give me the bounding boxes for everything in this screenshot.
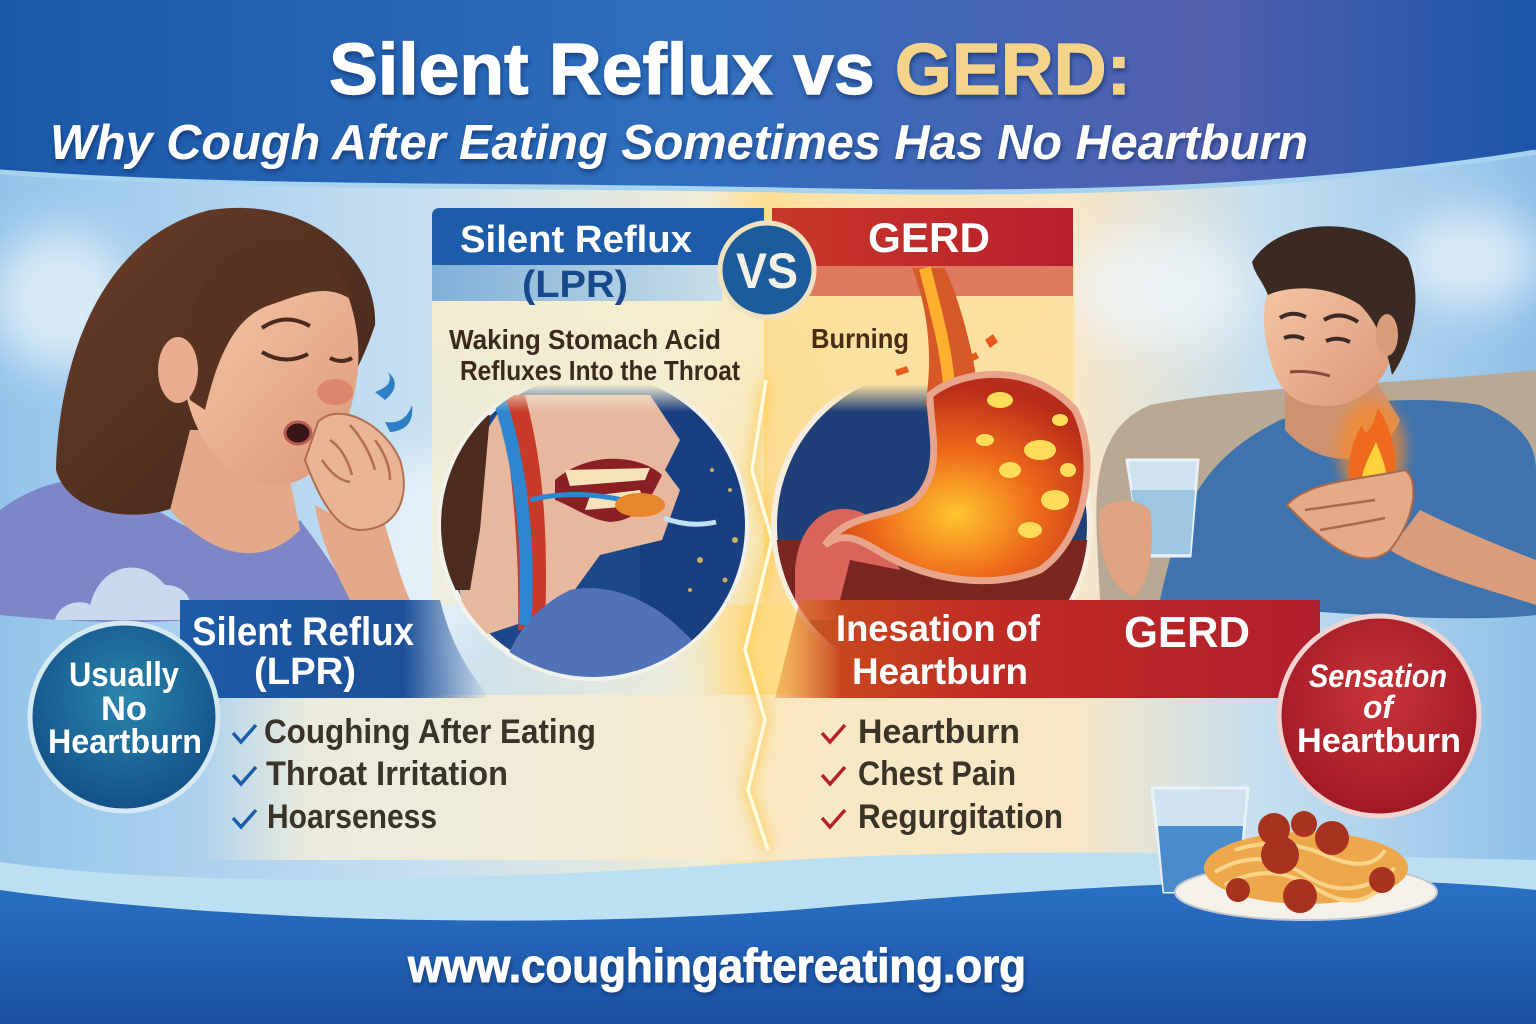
- icon: water glass: [1152, 788, 1248, 892]
- banner: Silent Reflux: (LPR): [254, 651, 356, 693]
- throat spray: [664, 518, 716, 524]
- acid bubbles: [976, 392, 1076, 538]
- VS badge: VS: [736, 243, 798, 299]
- list: gerd symptoms: Chest Pain: [858, 755, 1016, 793]
- footer band: [0, 852, 1536, 1024]
- man hair: [1252, 226, 1415, 375]
- banner: Silent Reflux: Silent Reflux: [192, 610, 414, 654]
- hand holding glass: [1099, 501, 1152, 597]
- illustration: burning stomach: [771, 266, 1093, 647]
- man body: [1160, 400, 1536, 618]
- heading: GERD tab: GERD: [868, 214, 990, 261]
- woman eyes: [262, 319, 352, 361]
- woman ear: [158, 337, 198, 403]
- text: waking stomach acid: Waking Stomach Acid: [449, 324, 721, 355]
- lightning divider: [745, 380, 772, 850]
- list: silent reflux symptoms: Coughing After Eating: [264, 713, 596, 751]
- throat face: [440, 395, 680, 640]
- illustration: coughing woman: [0, 208, 412, 622]
- text: burning: Burning: [811, 323, 909, 354]
- man eyes: [1280, 314, 1358, 342]
- woman hair back: [56, 208, 375, 515]
- banner: GERD: GERD: [1124, 608, 1250, 657]
- illustration: man with heartburn: [1096, 226, 1536, 618]
- chest flame: [1349, 408, 1395, 495]
- cough droplets: [375, 372, 412, 432]
- text: waking stomach acid: [449, 324, 740, 386]
- badge: usually no heartburn: No: [101, 690, 147, 728]
- badge: usually no heartburn: Heartburn: [48, 723, 202, 761]
- throat shoulder: [510, 588, 692, 677]
- list: gerd symptoms: Regurgitation: [858, 798, 1063, 836]
- banner: GERD: Heartburn: [852, 651, 1028, 692]
- woman nose blush: [317, 379, 353, 405]
- list backdrop: [200, 695, 1120, 860]
- header band: [0, 0, 1536, 192]
- woman mouth: [285, 422, 311, 444]
- banner: GERD: Inesation of: [836, 608, 1041, 649]
- list: gerd symptoms: Heartburn: [858, 713, 1020, 751]
- stomach lower tissue: [776, 540, 1088, 648]
- illustration: throat cross-section: [440, 370, 760, 680]
- woman fringe: [186, 239, 352, 410]
- heading: Silent Reflux LPR tab: Silent Reflux: [460, 219, 692, 261]
- cloud: [55, 568, 191, 620]
- list: silent reflux symptoms: [233, 713, 596, 836]
- VS badge: [720, 223, 814, 317]
- heading: Silent Reflux LPR tab: [432, 208, 764, 306]
- man ear: [1376, 314, 1398, 356]
- throat tube: [500, 395, 546, 630]
- badge: sensation of heartburn: [1279, 616, 1479, 816]
- woman arm: [315, 505, 410, 600]
- badge: sensation of heartburn: Heartburn: [1297, 722, 1461, 760]
- heading: Silent Reflux LPR tab: (LPR): [522, 264, 628, 306]
- icon: spaghetti plate: [1175, 811, 1437, 920]
- title: Silent Reflux vs GERD:: [329, 30, 1131, 110]
- subtitle: Why Cough After Eating Sometimes Has No Heartburn: [50, 116, 1308, 170]
- small intestine: [795, 509, 900, 620]
- woman shirt: [0, 480, 360, 622]
- esophagus: [912, 268, 975, 405]
- man forearm: [1390, 510, 1536, 605]
- man head: [1264, 273, 1394, 406]
- list: silent reflux symptoms: Throat Irritation: [266, 755, 508, 793]
- text: waking stomach acid: Refluxes Into the Throat: [460, 355, 740, 386]
- woman fist: [305, 414, 404, 530]
- glass in hand: [1127, 460, 1198, 556]
- badge: usually no heartburn: Usually: [69, 656, 179, 694]
- background clouds: [0, 210, 1536, 670]
- central glow: [708, 180, 828, 860]
- man hand: [1287, 470, 1413, 558]
- title: [50, 30, 1308, 170]
- sofa: [1096, 370, 1536, 600]
- man mouth: [1290, 372, 1330, 376]
- woman neck: [170, 430, 300, 553]
- panel: center-right backdrop: [768, 265, 1074, 605]
- heading: GERD tab: [772, 208, 1073, 296]
- chest flame glow: [1338, 400, 1406, 500]
- banner: Silent Reflux: [180, 600, 490, 698]
- badge: usually no heartburn: [30, 623, 218, 811]
- list: silent reflux symptoms: Hoarseness: [267, 798, 437, 836]
- footer url: www.coughingaftereating.org: [407, 939, 1026, 992]
- panel: center-left backdrop: [432, 265, 764, 605]
- throat hair: [440, 415, 490, 590]
- list: gerd symptoms: [822, 713, 1063, 836]
- banner: GERD: [775, 600, 1320, 698]
- man neck: [1285, 370, 1400, 459]
- badge: sensation of heartburn: of: [1363, 689, 1396, 725]
- throat mouth: [555, 459, 662, 522]
- stomach body: [825, 374, 1087, 581]
- flying embers: [895, 334, 998, 376]
- woman face: [185, 288, 358, 485]
- throat sparkles: [688, 468, 738, 592]
- badge: sensation of heartburn: Sensation: [1309, 658, 1447, 694]
- throat night sky: [640, 385, 745, 670]
